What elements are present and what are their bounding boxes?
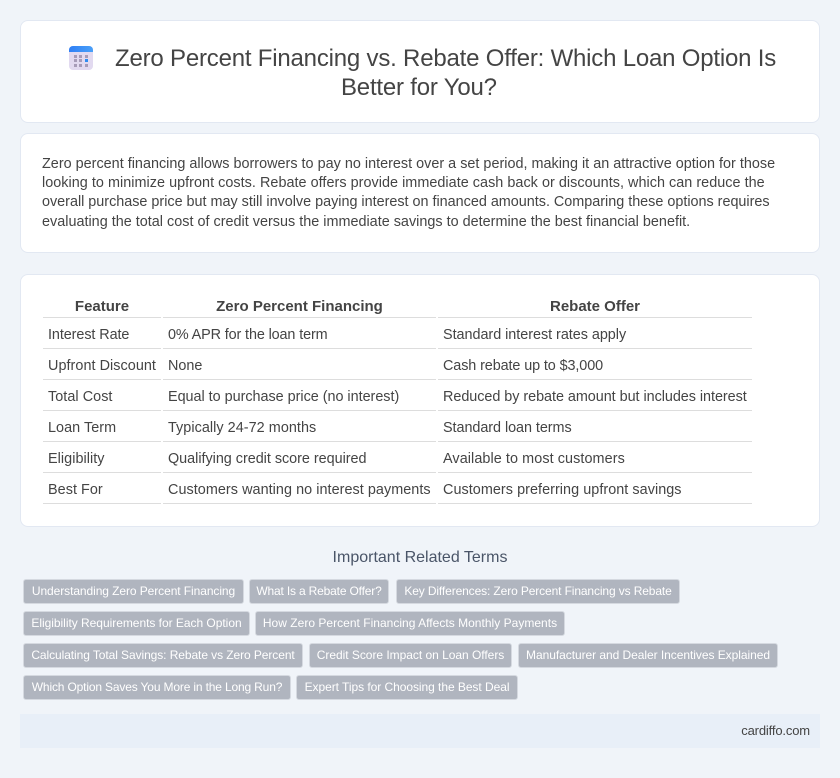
tag [255, 611, 565, 636]
intro panel [20, 133, 820, 253]
row: eligibility [48, 451, 625, 467]
title: Zero Percent Financing vs. Rebate Offer: Which Loan Option Is [115, 45, 776, 72]
tag: Which Option Saves You More in the Long Run? [32, 680, 282, 694]
row: eligibility: Qualifying credit score required [168, 451, 367, 467]
intro text: Zero percent financing allows borrowers to pay no interest over a set period, making it an attractive option for those [42, 156, 775, 172]
tag: Understanding Zero Percent Financing [32, 584, 235, 598]
row: total cost [48, 389, 747, 405]
row: best for: Customers wanting no interest payments [168, 482, 431, 498]
row: interest rate [48, 327, 626, 343]
tag [296, 675, 518, 700]
related terms tags [23, 579, 778, 700]
row: interest rate: Standard interest rates apply [443, 327, 626, 343]
tag: Eligibility Requirements for Each Option [31, 616, 242, 630]
row: loan term: Standard loan terms [443, 420, 572, 436]
row: best for: Customers preferring upfront savings [443, 482, 682, 498]
tag: Credit Score Impact on Loan Offers [317, 648, 504, 662]
tag [23, 643, 303, 668]
row: upfront discount: Cash rebate up to $3,000 [443, 358, 603, 374]
intro text: overall purchase price but may still involve paying interest on financed amounts. Comparing these options requires [42, 194, 770, 210]
tag [23, 611, 250, 636]
row: best for: Best For [48, 482, 103, 498]
row: upfront discount: Upfront Discount [48, 358, 156, 374]
row: interest rate: 0% APR for the loan term [168, 327, 328, 343]
tag [249, 579, 389, 604]
intro text: evaluating the total cost of credit versus the immediate savings to determine the best financial benefit. [42, 214, 690, 230]
row: upfront discount [48, 358, 603, 374]
tag: How Zero Percent Financing Affects Monthly Payments [263, 616, 557, 630]
tag: Calculating Total Savings: Rebate vs Zero Percent [31, 648, 295, 662]
footer bar [20, 714, 820, 748]
title [115, 45, 776, 101]
header card [20, 20, 820, 123]
table header: Feature [75, 298, 129, 315]
row: loan term: Loan Term [48, 420, 116, 436]
row: total cost: Reduced by rebate amount but includes interest [443, 389, 747, 405]
tag: Key Differences: Zero Percent Financing vs Rebate [404, 584, 672, 598]
row: best for [48, 482, 682, 498]
tag: What Is a Rebate Offer? [256, 584, 382, 598]
tag [23, 579, 244, 604]
intro text: looking to minimize upfront costs. Rebate offers provide immediate cash back or discounts, which can reduce the [42, 175, 765, 191]
row: total cost: Equal to purchase price (no interest) [168, 389, 399, 405]
row: eligibility: Eligibility [48, 451, 105, 467]
footer source: cardiffo.com [741, 723, 810, 738]
row: total cost: Total Cost [48, 389, 112, 405]
related terms heading: Important Related Terms [333, 549, 507, 566]
tag: Expert Tips for Choosing the Best Deal [305, 680, 509, 694]
row: loan term [48, 420, 572, 436]
table header [75, 298, 640, 315]
tag [518, 643, 778, 668]
row: eligibility: Available to most customers [443, 451, 625, 467]
row: upfront discount: None [168, 358, 202, 374]
title: Better for You? [341, 74, 497, 101]
tag [396, 579, 680, 604]
tag: Manufacturer and Dealer Incentives Explained [526, 648, 770, 662]
table header: Zero Percent Financing [216, 298, 383, 315]
tag [23, 675, 291, 700]
intro text [42, 156, 775, 230]
table header: Rebate Offer [550, 298, 640, 315]
tag [309, 643, 512, 668]
row: interest rate: Interest Rate [48, 327, 129, 343]
comparison table [43, 298, 752, 504]
icon: calendar [69, 46, 93, 70]
table panel [20, 274, 820, 527]
row: loan term: Typically 24-72 months [168, 420, 316, 436]
